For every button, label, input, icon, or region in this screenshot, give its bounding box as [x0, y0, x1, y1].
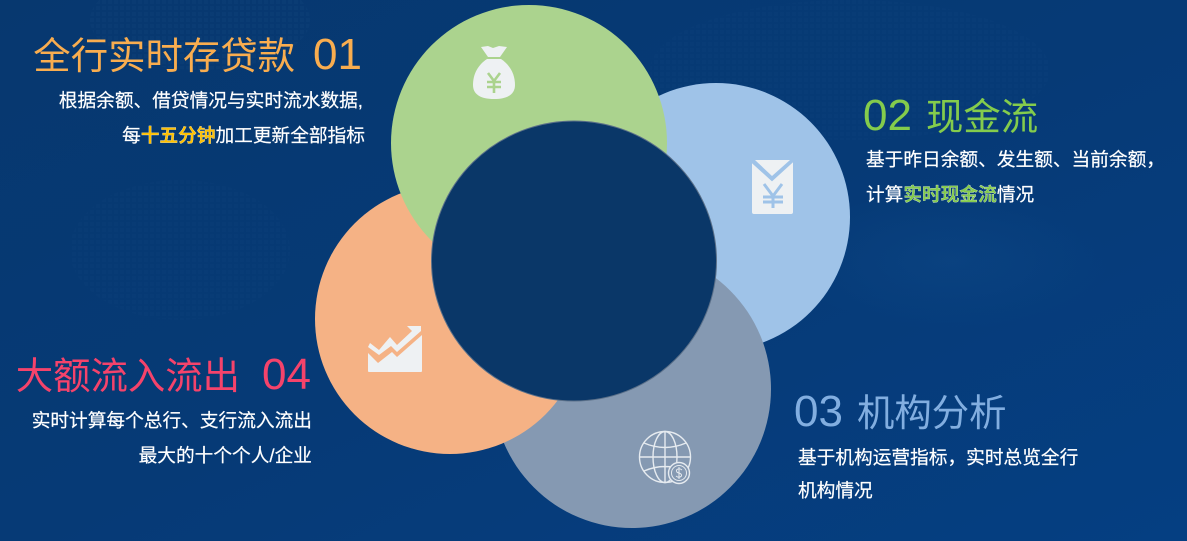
icon: rising chart	[368, 326, 422, 372]
text 03 line 1: 基于机构运营指标，实时总览全行	[798, 447, 1078, 468]
circle: grey 03	[493, 250, 771, 528]
icon: money bag	[473, 46, 515, 99]
text 03 line 2: 机构情况	[798, 480, 873, 501]
block 02	[863, 91, 1165, 205]
icon: globe with dollar	[640, 432, 690, 484]
text 02 line 1: 基于昨日余额、发生额、当前余额，	[866, 149, 1165, 170]
circle: blue 02	[582, 83, 850, 351]
block 01	[33, 30, 365, 146]
heading 04: 大额流入流出 04	[16, 350, 311, 399]
text 02 line 2: 计算实时现金流情况	[866, 184, 1034, 205]
heading 03: 03 机构分析	[794, 387, 1007, 436]
heading 02: 02 现金流	[863, 91, 1038, 140]
circle: orange 04	[315, 184, 585, 454]
text 01 line 2: 每十五分钟加工更新全部指标	[122, 125, 365, 146]
text 04 line 1: 实时计算每个总行、支行流入流出	[32, 410, 312, 431]
circle: center dark	[432, 121, 716, 401]
text 01 line 1: 根据余额、借贷情况与实时流水数据,	[59, 90, 363, 111]
block 03	[794, 387, 1078, 501]
icon: yen envelope	[751, 160, 794, 214]
text 04 line 2: 最大的十个个人/企业	[139, 445, 312, 466]
block 04	[16, 350, 312, 466]
heading 01: 全行实时存贷款 01	[33, 30, 362, 79]
circle: green 01	[391, 5, 667, 281]
